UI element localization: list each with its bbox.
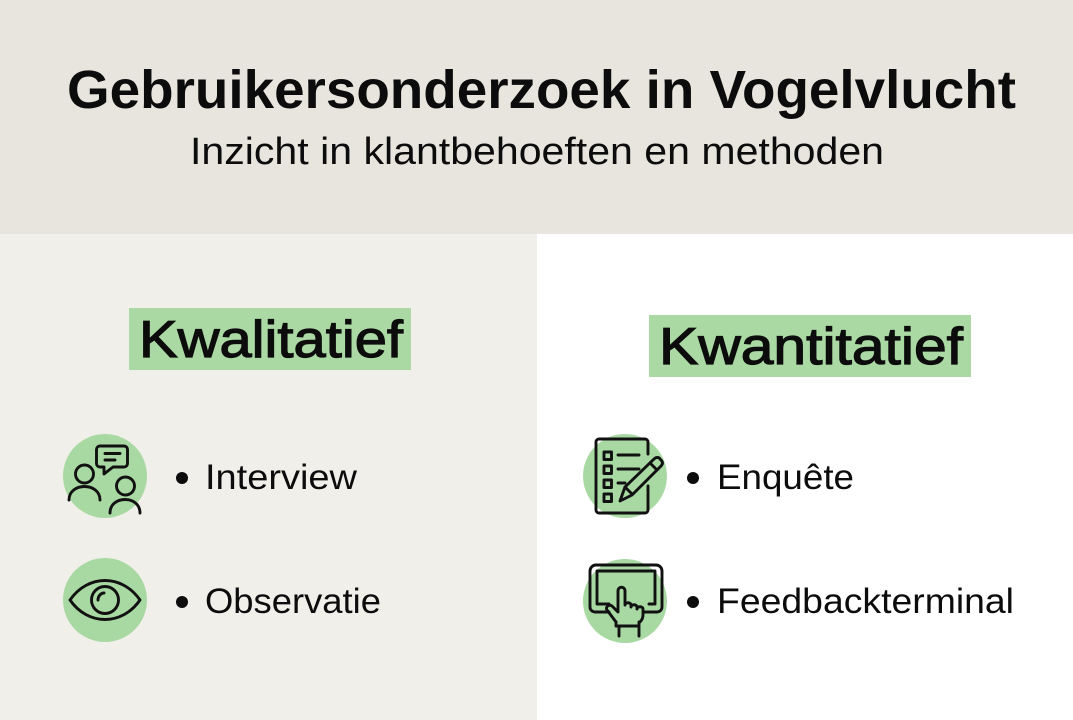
heading: Kwantitatief: Kwantitatief xyxy=(659,318,964,376)
bullet and label: Interview: Interview xyxy=(205,458,358,497)
panel: kwalitatief xyxy=(0,234,537,720)
title: Gebruikersonderzoek in Vogelvlucht xyxy=(67,60,1016,120)
icon: enquete xyxy=(583,434,667,518)
heading: Kwalitatief: Kwalitatief xyxy=(139,311,404,369)
panel: kwantitatief xyxy=(537,234,1073,720)
bullet and label: Feedbackterminal: Feedbackterminal xyxy=(717,582,1014,621)
icon: interview xyxy=(63,434,147,518)
subtitle: Inzicht in klantbehoeften en methoden xyxy=(190,131,884,173)
bullet and label: Enquête: Enquête xyxy=(717,458,854,497)
icon: feedbackterminal xyxy=(583,559,667,643)
bullet and label: Observatie: Observatie xyxy=(205,582,381,621)
header band xyxy=(0,0,1073,234)
icon: observatie xyxy=(63,558,147,642)
